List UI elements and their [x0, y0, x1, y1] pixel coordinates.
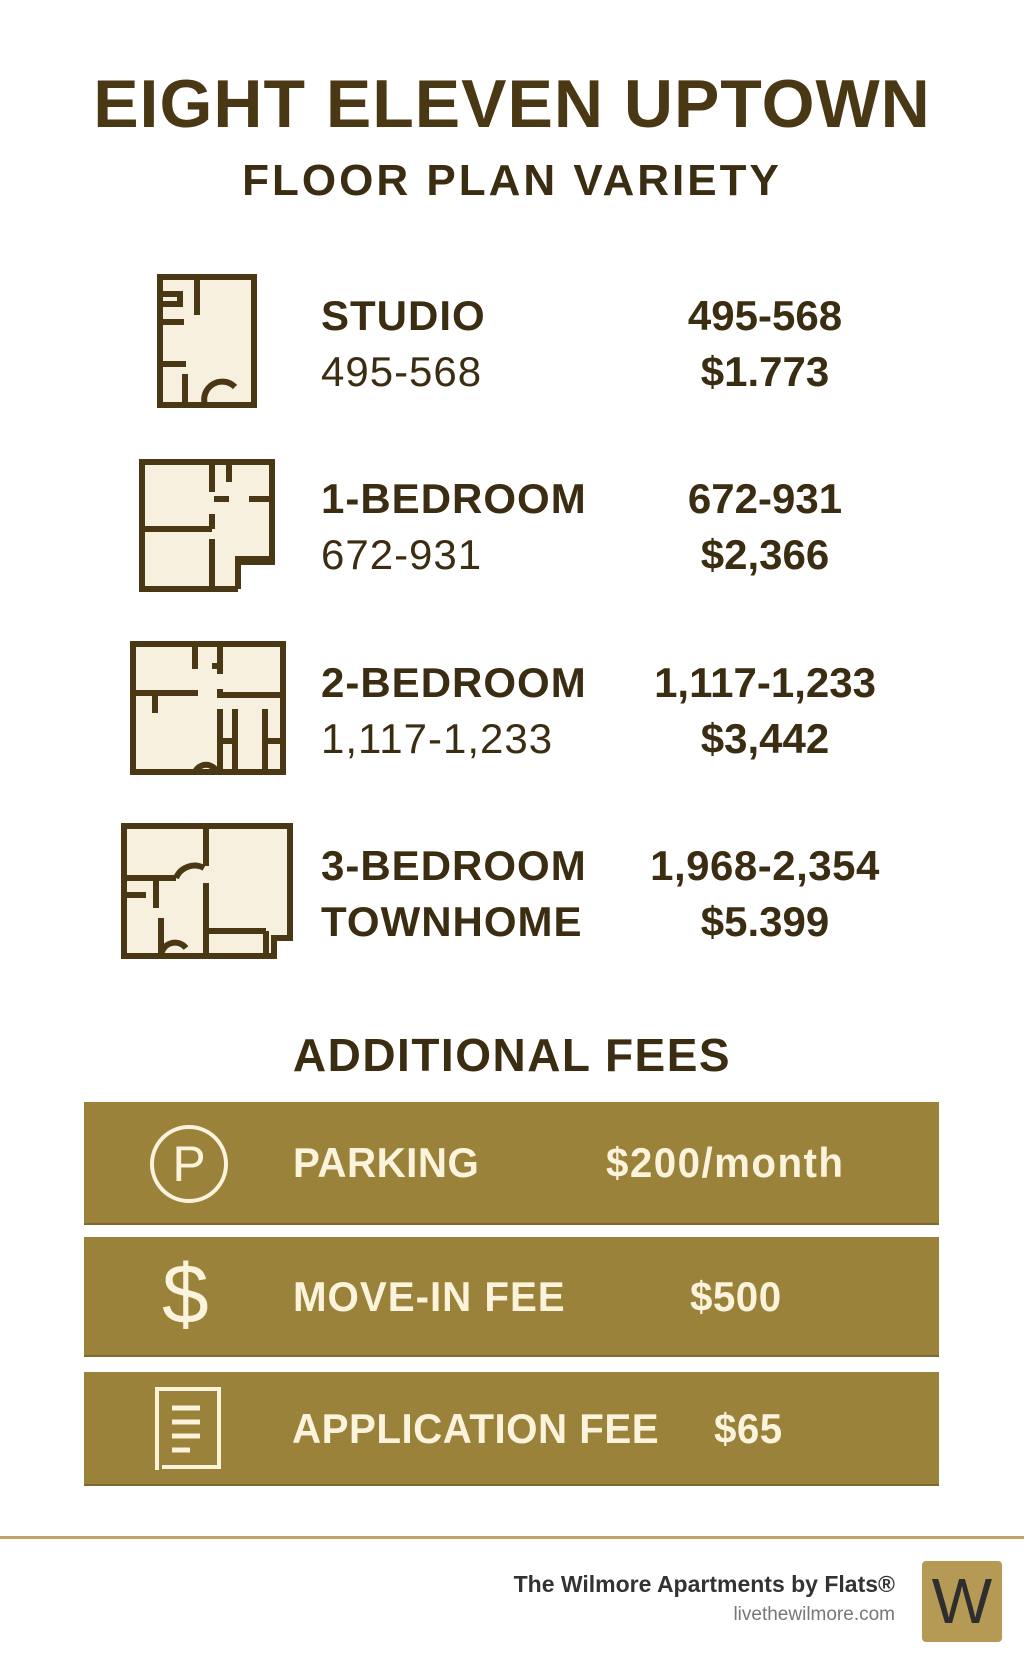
icon: document — [155, 1387, 221, 1470]
logo: W — [932, 1565, 992, 1637]
application text: APPLICATION FEE — [292, 1405, 659, 1452]
1-bedroom label: 1-BEDROOM — [321, 475, 587, 522]
heading: additional fees: ADDITIONAL FEES — [293, 1029, 731, 1081]
text: TOWNHOME — [321, 898, 583, 945]
text: $3,442 — [701, 715, 829, 762]
text: 1,117-1,233 — [321, 715, 553, 762]
3-bedroom values: 1,968-2,354 — [650, 842, 880, 889]
text: $5.399 — [701, 898, 829, 945]
icon: studio plan — [157, 274, 257, 408]
studio label: STUDIO — [321, 292, 486, 339]
icon: 2-bedroom plan — [130, 641, 286, 775]
footer text: livethewilmore.com — [733, 1604, 895, 1625]
panel: parking: $200/month — [606, 1139, 844, 1186]
studio values: 495-568 — [688, 292, 842, 339]
panel: parking — [84, 1102, 939, 1225]
text: 495-568 — [321, 348, 482, 395]
text: 672-931 — [321, 531, 482, 578]
text: $2,366 — [701, 531, 829, 578]
logo — [922, 1561, 1002, 1642]
2-bedroom label: 2-BEDROOM — [321, 659, 587, 706]
text: $1.773 — [701, 348, 829, 395]
move-in text: MOVE-IN FEE — [293, 1273, 566, 1320]
panel: move-in fee — [84, 1237, 939, 1357]
icon: parking: P — [172, 1136, 206, 1192]
footer text: The Wilmore Apartments by Flats® — [514, 1571, 895, 1597]
parking text: PARKING — [293, 1139, 479, 1186]
panel: move-in fee: $500 — [690, 1273, 782, 1320]
title: EIGHT ELEVEN UPTOWN — [93, 66, 931, 142]
3-bedroom label: 3-BEDROOM — [321, 842, 587, 889]
2-bedroom values: 1,117-1,233 — [654, 659, 876, 706]
subtitle: FLOOR PLAN VARIETY — [242, 156, 782, 205]
panel: application fee: $65 — [714, 1405, 783, 1452]
icon: 3-bedroom plan — [121, 823, 293, 959]
panel: application fee — [84, 1372, 939, 1486]
icon: 1-bedroom plan — [139, 459, 275, 592]
footer text — [514, 1571, 895, 1625]
icon: dollar: $ — [162, 1247, 209, 1341]
icon: parking — [150, 1125, 228, 1203]
1-bedroom values: 672-931 — [688, 475, 842, 522]
